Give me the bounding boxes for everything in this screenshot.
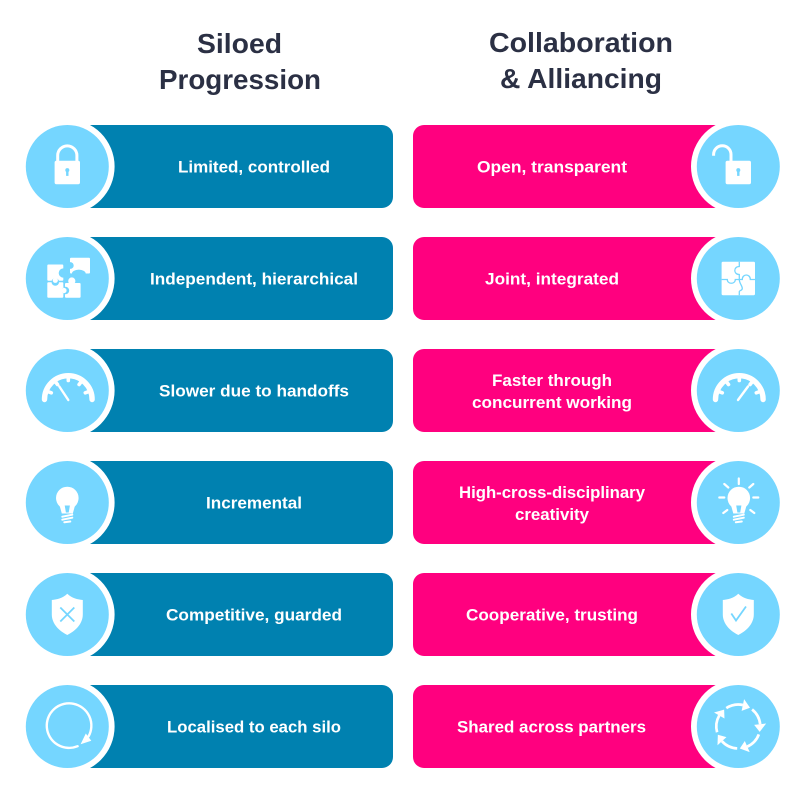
icon: shield with cross [52, 594, 83, 635]
icon: cycle of five arrows [709, 699, 768, 756]
row: competitive vs cooperative [20, 567, 786, 662]
panel: Open, transparent: Open, transparent [477, 158, 627, 176]
heading: Siloed Progression: Siloed [197, 28, 282, 59]
icon: lit bulb [719, 478, 758, 522]
panel: Slower due to handoffs: Slower due to handoffs [159, 382, 349, 400]
panel: Joint, integrated: Joint, integrated [485, 270, 619, 288]
heading: Collaboration & Alliancing: & Alliancing [500, 63, 662, 94]
panel: Cooperative, trusting [413, 567, 786, 662]
panel: Shared across partners: Shared across partners [457, 718, 646, 736]
panel: Faster through concurrent working [413, 343, 786, 438]
panel: Competitive, guarded: Competitive, guarded [166, 606, 342, 624]
icon: light bulb [56, 487, 79, 522]
row: slower vs faster [20, 343, 786, 438]
panel: Localised to each silo: Localised to each silo [167, 718, 341, 736]
panel: Incremental [20, 455, 393, 550]
panel: Joint, integrated [413, 231, 786, 326]
panel: High-cross-disciplinary creativity: High-cross-disciplinary [459, 483, 646, 502]
icon: shield with check [723, 594, 754, 635]
panel: Open, transparent [413, 119, 786, 214]
panel: Limited, controlled: Limited, controlled [178, 158, 330, 176]
heading: Collaboration & Alliancing [489, 27, 673, 94]
panel: High-cross-disciplinary creativity: creativity [515, 505, 590, 524]
row: independent vs joint [20, 231, 786, 326]
panel: High-cross-disciplinary creativity [413, 455, 786, 550]
panel: Competitive, guarded [20, 567, 393, 662]
panel: Limited, controlled [20, 119, 393, 214]
heading: Siloed Progression [159, 28, 321, 95]
panel: Faster through concurrent working: concurrent working [472, 393, 632, 412]
panel: Incremental: Incremental [206, 494, 302, 512]
heading: Collaboration & Alliancing: Collaboration [489, 27, 673, 58]
panel: Independent, hierarchical: Independent, hierarchical [150, 270, 358, 288]
panel: Independent, hierarchical [20, 231, 393, 326]
panel: Localised to each silo [20, 679, 393, 774]
panel: Faster through concurrent working: Faster through [492, 371, 612, 390]
heading: Siloed Progression: Progression [159, 64, 321, 95]
icon: single circular arrow [47, 703, 91, 748]
icon: open padlock [714, 146, 751, 184]
row: limited vs open [20, 119, 786, 214]
icon: joined puzzle [722, 262, 755, 295]
row: incremental vs creativity [20, 455, 786, 550]
icon: gauge high [716, 375, 763, 400]
panel: Slower due to handoffs [20, 343, 393, 438]
icon: closed padlock [55, 146, 80, 184]
panel: Cooperative, trusting: Cooperative, trusting [466, 606, 638, 624]
icon: gauge low [45, 375, 92, 400]
icon: scattered puzzle pieces [47, 258, 90, 298]
panel: Shared across partners [413, 679, 786, 774]
row: localised vs shared [20, 679, 786, 774]
